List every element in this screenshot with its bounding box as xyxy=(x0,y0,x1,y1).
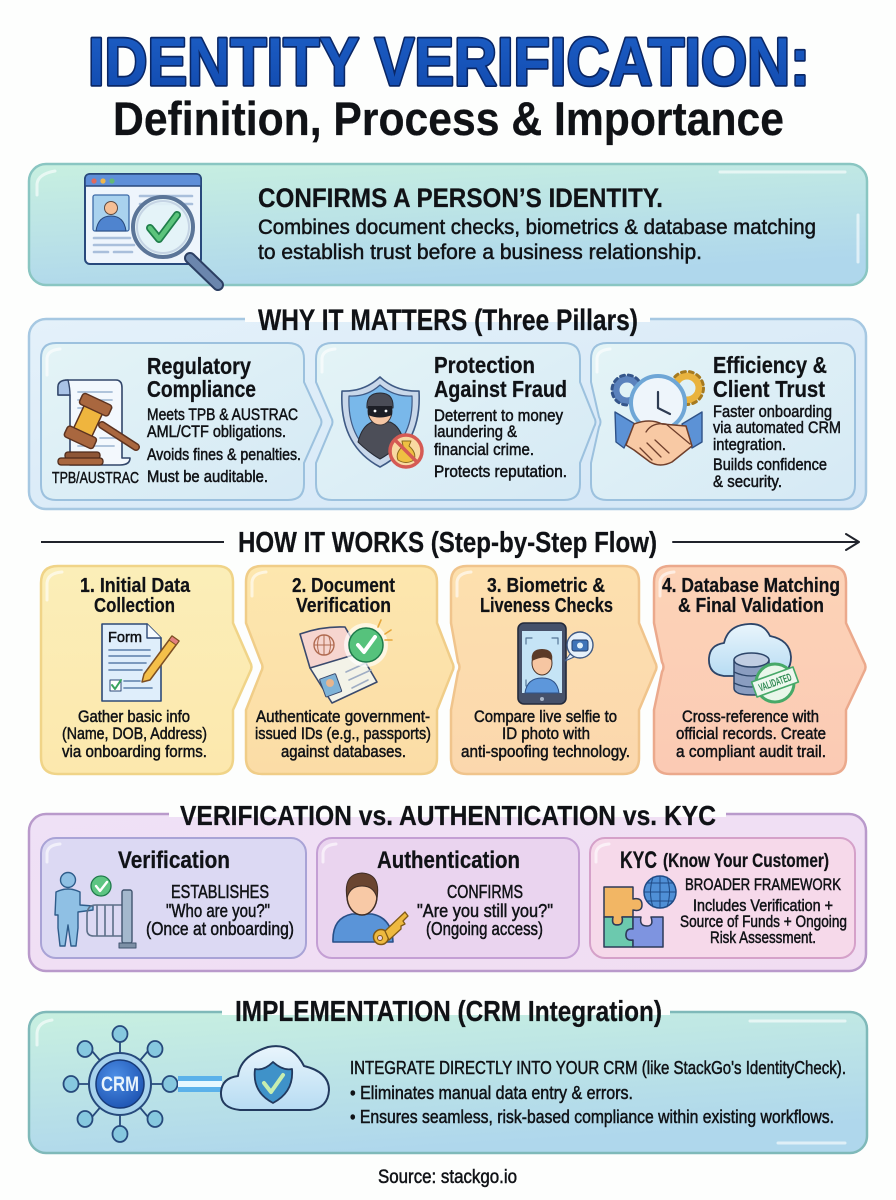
text: efficiency and client trust xyxy=(713,352,841,491)
implementation text: • Eliminates manual data entry & errors. xyxy=(350,1083,633,1103)
step 1: initial data collection xyxy=(41,566,252,774)
step 3 description xyxy=(461,707,630,761)
heading: comparison: VERIFICATION vs. AUTHENTICATION vs. KYC xyxy=(180,800,716,831)
text: protection against fraud: financial crime. xyxy=(434,441,534,459)
icon: cloud database validated stamp: VALIDATED xyxy=(757,671,793,694)
step 1 heading: Collection xyxy=(94,595,175,617)
definition text: CONFIRMS A PERSON’S IDENTITY. xyxy=(258,183,663,213)
step 4 description: official records. Create xyxy=(676,724,826,743)
text: KYC: Includes Verification + xyxy=(693,897,833,915)
text: KYC: (Know Your Customer) xyxy=(663,851,829,872)
icon: secure cloud xyxy=(221,1046,329,1110)
text: authentication: (Ongoing access) xyxy=(426,919,543,939)
step 2 description: Authenticate government- xyxy=(256,707,430,726)
card: KYC xyxy=(590,838,855,958)
step 2: document verification xyxy=(246,566,454,774)
text: protection against fraud: Protection xyxy=(434,352,535,378)
panel: definition xyxy=(29,164,867,285)
icon: person at gate xyxy=(55,872,136,948)
text: KYC: Risk Assessment. xyxy=(710,929,816,947)
step 2 heading xyxy=(292,575,395,617)
text: authentication: CONFIRMS xyxy=(447,882,523,902)
text: verification: Verification xyxy=(118,847,230,874)
step 1 heading: 1. Initial Data xyxy=(80,575,191,597)
text: efficiency and client trust: & security. xyxy=(713,473,782,491)
card: verification xyxy=(41,838,306,958)
heading: how it works with flow arrow: HOW IT WORKS (Step-by-Step Flow) xyxy=(238,527,657,559)
heading: why it matters: WHY IT MATTERS (Three Pillars) xyxy=(258,304,638,337)
step 3 heading: Liveness Checks xyxy=(480,595,613,617)
pillar: regulatory compliance xyxy=(41,343,322,500)
step 2 heading: Verification xyxy=(296,595,391,617)
step 1 description: via onboarding forms. xyxy=(62,742,207,761)
step 4 description: a compliant audit trail. xyxy=(676,742,826,761)
title: Definition, Process & Importance xyxy=(113,92,784,145)
step 1 heading xyxy=(80,575,191,617)
pillar: efficiency and client trust xyxy=(591,343,855,500)
text: efficiency and client trust: via automated CRM xyxy=(713,419,841,437)
card: authentication xyxy=(317,838,579,958)
title xyxy=(88,24,810,145)
text: verification: ESTABLISHES xyxy=(171,882,269,902)
pillar: protection against fraud xyxy=(316,343,596,500)
step 4: database matching and final validation xyxy=(654,566,866,774)
title: IDENTITY VERIFICATION: xyxy=(88,24,810,100)
step 4 heading xyxy=(662,575,840,617)
text: authentication xyxy=(377,847,553,939)
step 3 description: ID photo with xyxy=(502,724,590,743)
icon: passport with check xyxy=(300,620,392,703)
text: regulatory compliance: Regulatory xyxy=(147,353,251,379)
panel: verification vs authentication vs KYC xyxy=(29,800,866,971)
text: regulatory compliance: AML/CTF obligations. xyxy=(147,423,286,441)
text: efficiency and client trust: Client Trust xyxy=(713,376,825,402)
text: authentication: "Are you still you?" xyxy=(417,901,553,921)
icon: scroll and gavel xyxy=(58,380,136,465)
icon: CRM hub: CRM xyxy=(101,1073,139,1096)
panel: why it matters xyxy=(29,304,866,509)
icon: puzzle and globe xyxy=(604,876,676,947)
step 2 heading: 2. Document xyxy=(292,575,395,597)
text: regulatory compliance: Avoids fines & penalties. xyxy=(147,446,301,464)
text: protection against fraud: Protects reputation. xyxy=(434,463,567,481)
text: efficiency and client trust: Faster onboarding xyxy=(713,403,832,421)
icon: person with key xyxy=(333,873,408,944)
definition text: Combines document checks, biometrics & database matching xyxy=(258,216,816,239)
text: efficiency and client trust: Efficiency & xyxy=(713,352,827,378)
connector beam xyxy=(178,1076,222,1092)
text: regulatory compliance: Meets TPB & AUSTRAC xyxy=(147,406,298,424)
text: regulatory compliance: Compliance xyxy=(147,376,256,402)
step 4 description xyxy=(676,707,826,761)
panel: implementation xyxy=(29,996,867,1153)
text: protection against fraud xyxy=(434,352,567,481)
icon: form and pencil xyxy=(102,624,179,701)
step 3 description: anti-spoofing technology. xyxy=(461,742,630,761)
icon: phone with selfie xyxy=(518,623,593,704)
text: verification: (Once at onboarding) xyxy=(146,919,294,939)
step 2 description: against databases. xyxy=(281,742,406,761)
text: authentication: Authentication xyxy=(377,847,520,874)
text: KYC: Source of Funds + Ongoing xyxy=(680,913,847,931)
icon: form and pencil: Form xyxy=(108,629,142,646)
source credit: Source: stackgo.io xyxy=(378,1167,517,1188)
text: verification xyxy=(118,847,294,939)
text: protection against fraud: laundering & xyxy=(434,423,517,441)
step 1 description: Gather basic info xyxy=(78,707,190,726)
heading: implementation: IMPLEMENTATION (CRM Integration) xyxy=(235,996,662,1028)
text: KYC: BROADER FRAMEWORK xyxy=(685,875,842,894)
text: efficiency and client trust: Builds confidence xyxy=(713,456,827,474)
caption: TPB/AUSTRAC: TPB/AUSTRAC xyxy=(52,470,139,487)
step 2 description xyxy=(255,707,431,761)
definition text xyxy=(258,183,816,264)
step 3: biometric and liveness checks xyxy=(451,566,656,774)
heading: how it works with flow arrow xyxy=(41,527,859,559)
step 3 heading xyxy=(480,575,613,617)
step 4 heading: & Final Validation xyxy=(678,595,824,617)
text: protection against fraud: Deterrent to money xyxy=(434,407,564,425)
icon: clock, gears and handshake xyxy=(612,372,704,465)
step 4 heading: 4. Database Matching xyxy=(662,575,840,597)
text: verification: "Who are you?" xyxy=(166,901,270,921)
text: regulatory compliance: Must be auditable. xyxy=(147,468,268,486)
text: KYC xyxy=(620,847,847,947)
text: regulatory compliance xyxy=(147,353,301,486)
icon: cloud database validated stamp xyxy=(709,624,798,702)
text: protection against fraud: Against Fraud xyxy=(434,376,567,402)
step 3 heading: 3. Biometric & xyxy=(487,575,605,597)
step 2 description: issued IDs (e.g., passports) xyxy=(255,724,431,743)
step 4 description: Cross-reference with xyxy=(682,707,819,726)
step 1 description xyxy=(62,707,207,761)
step 1 description: (Name, DOB, Address) xyxy=(62,724,207,743)
icon: browser with magnifier xyxy=(85,174,218,285)
text: efficiency and client trust: integration. xyxy=(713,436,786,454)
text: KYC: KYC xyxy=(620,847,657,874)
step 3 description: Compare live selfie to xyxy=(474,707,617,726)
implementation text xyxy=(350,1058,846,1127)
implementation text: • Ensures seamless, risk-based compliance within existing workflows. xyxy=(350,1107,834,1127)
icon: shield with thief xyxy=(342,377,422,467)
icon: CRM hub xyxy=(64,1026,178,1142)
definition text: to establish trust before a business relationship. xyxy=(258,241,702,264)
